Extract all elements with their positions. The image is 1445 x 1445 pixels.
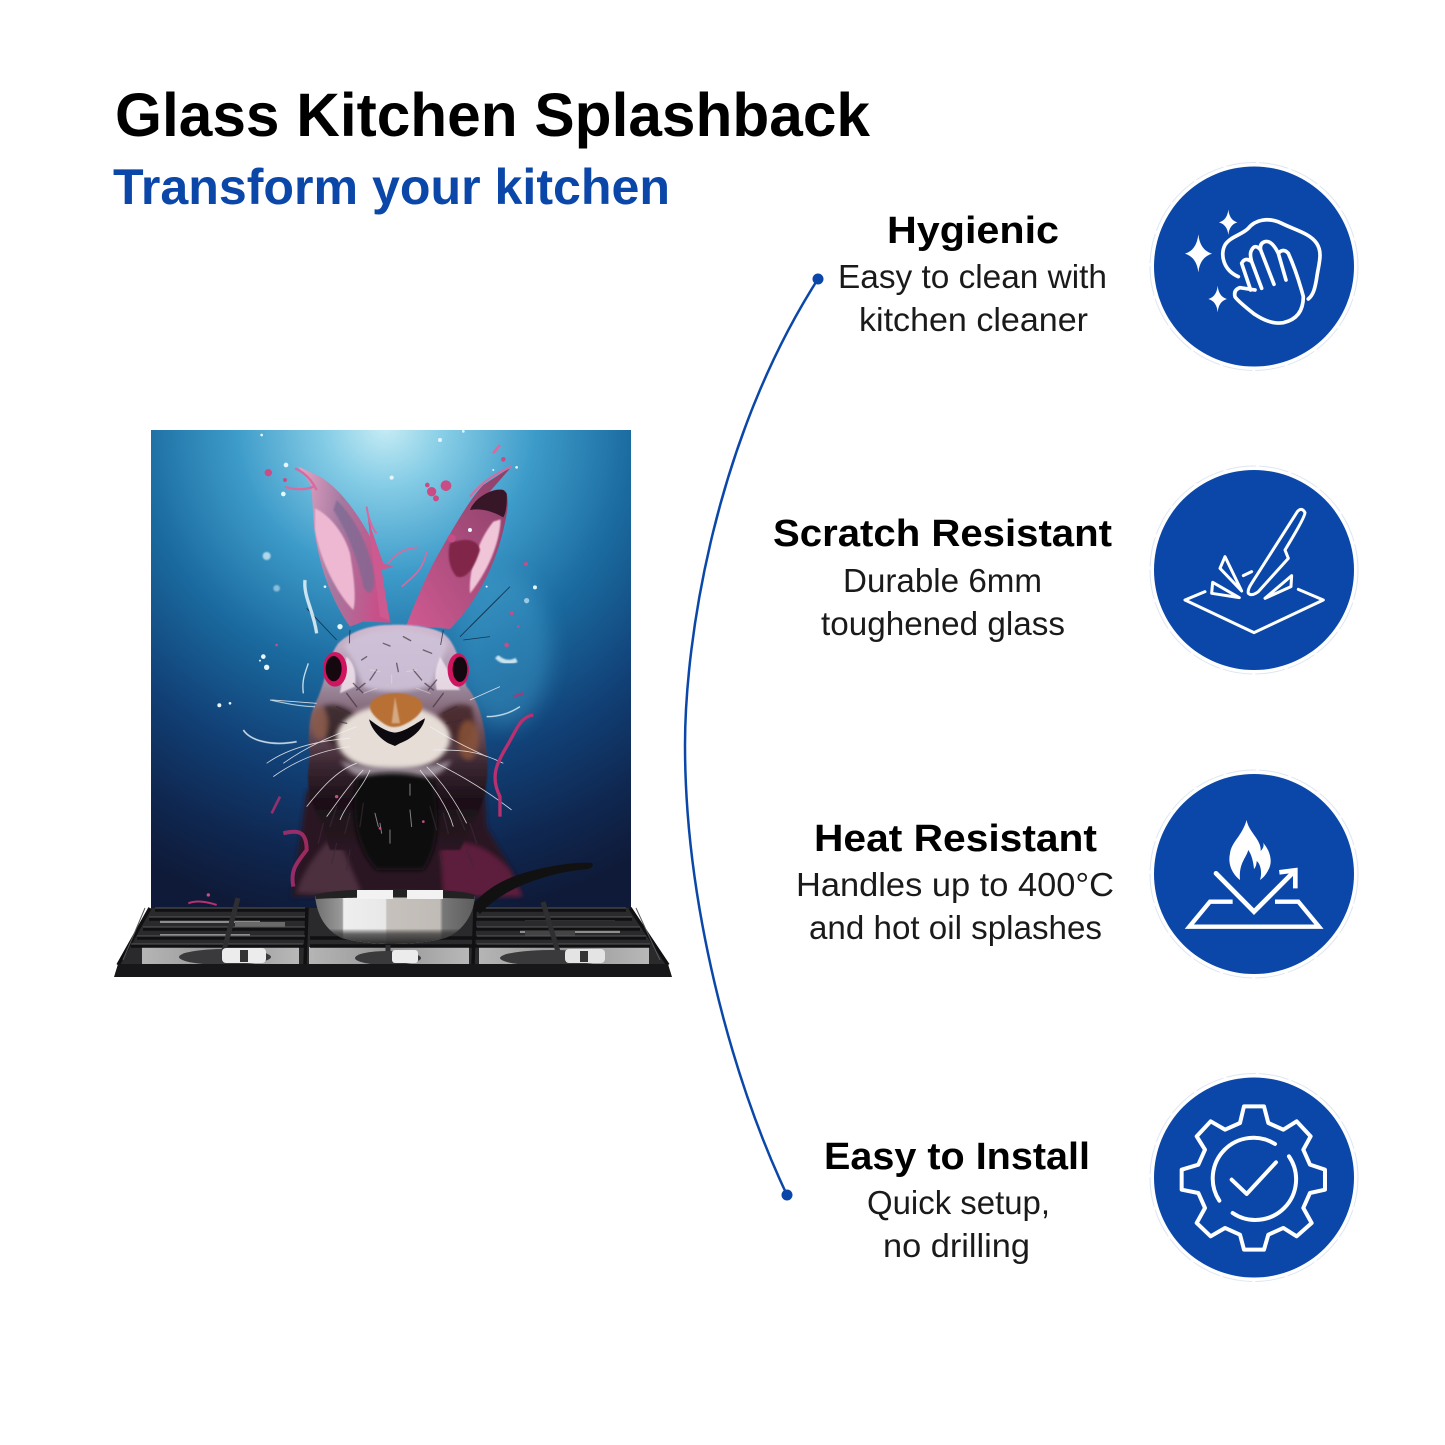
icon: flame on glass [1150, 770, 1358, 978]
heading: Easy to Install [824, 1136, 1090, 1178]
feature: heat resistant [796, 818, 1114, 946]
heading: Heat Resistant [814, 818, 1097, 860]
description: toughened glass [821, 605, 1065, 642]
pan shade [315, 896, 475, 944]
forehead highlight [343, 629, 447, 691]
connector curve [685, 279, 818, 1195]
steel burner plates [142, 947, 299, 965]
splashback image: rabbit artwork [151, 430, 631, 910]
upper burner highlights [160, 918, 620, 937]
description [821, 562, 1065, 642]
ear antennae whiskers [307, 587, 510, 645]
title: Glass Kitchen Splashback [115, 81, 870, 149]
pan rim [315, 889, 475, 899]
whiskers [267, 687, 512, 827]
icon: knife on glass [1150, 466, 1358, 674]
front bar [114, 964, 672, 977]
grate highlights [123, 908, 660, 960]
paint droplets [207, 457, 528, 897]
subtitle: Transform your kitchen [113, 159, 670, 215]
description [867, 1184, 1050, 1264]
description: Durable 6mm [843, 562, 1042, 599]
nose [369, 718, 425, 746]
left ear [298, 467, 393, 627]
description [796, 866, 1114, 946]
gas hob [114, 898, 672, 977]
left eye [323, 652, 347, 687]
infographic canvas [114, 92, 1358, 1282]
grate bars [118, 908, 668, 965]
description: no drilling [883, 1227, 1030, 1264]
heading: Scratch Resistant [773, 513, 1112, 555]
description: kitchen cleaner [859, 301, 1088, 338]
connector dot top [812, 274, 824, 284]
heading: Hygienic [887, 210, 1059, 252]
frying pan [315, 863, 593, 944]
chin dark area [354, 773, 437, 870]
feature: hygienic [838, 210, 1107, 338]
description: Quick setup, [867, 1184, 1050, 1221]
description: Handles up to 400°C [796, 866, 1114, 903]
pan handle [472, 863, 593, 914]
head [308, 625, 488, 850]
description: Easy to clean with [838, 258, 1107, 295]
grate cross bars [220, 898, 562, 965]
white water splash [243, 580, 520, 743]
dark cheek shadows [323, 705, 358, 747]
glow behind the head [457, 573, 550, 727]
feature: scratch resistant [773, 513, 1112, 642]
fur texture [318, 637, 477, 870]
burner left [179, 948, 271, 965]
hob surface [118, 908, 668, 965]
description: and hot oil splashes [809, 909, 1102, 946]
magenta paint splashes [188, 445, 533, 905]
muzzle [337, 705, 450, 772]
rim highlights [357, 890, 443, 899]
pan body [315, 896, 475, 944]
cheek tones [311, 707, 329, 740]
icon: cleaning hand [1150, 162, 1358, 370]
connector dot bottom [782, 1190, 792, 1200]
right eye [448, 653, 469, 687]
body and dark chest [292, 790, 522, 897]
water droplets [217, 430, 537, 707]
nose bridge in orange brown [370, 693, 423, 727]
burner right [500, 949, 605, 966]
icon: gear with check [1150, 1074, 1358, 1282]
description [838, 258, 1107, 338]
burner middle [355, 950, 421, 965]
feature: easy to install [824, 1136, 1090, 1264]
right ear [407, 467, 512, 629]
